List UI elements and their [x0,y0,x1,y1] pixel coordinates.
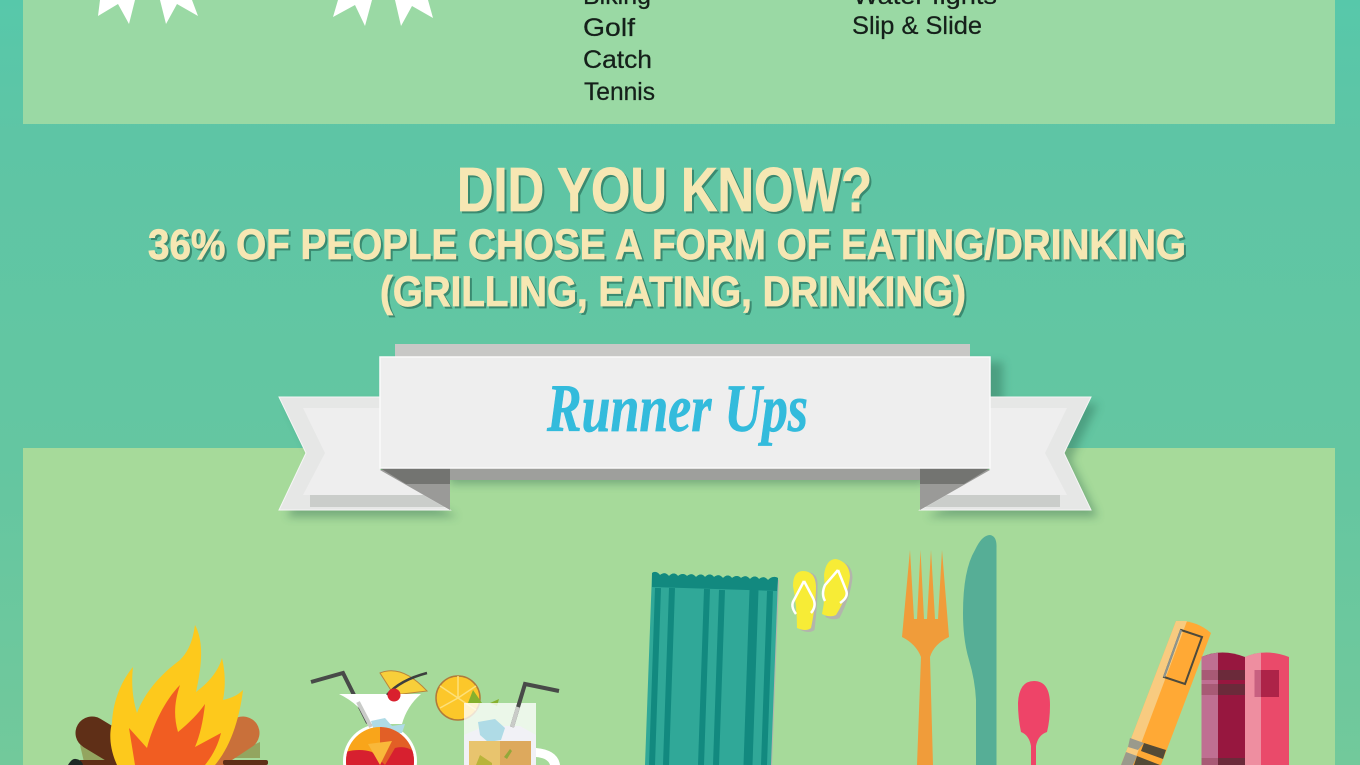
book one [1202,652,1245,765]
icon: sangria glass [311,671,427,765]
text: list column one: Tennis [584,78,655,106]
icon: fork [902,550,949,765]
icon: rosette ribbon tails left [98,0,198,24]
text: eating and drinking statistic: 36% OF PEOPLE CHOSE A FORM OF EATING/DRINKING [148,221,1186,269]
text: list column two: Slip & Slide [852,12,982,40]
icon: stacked books [1202,652,1289,765]
text: list column two [852,0,997,40]
ribbon left tail [279,397,450,510]
icon: flip flops [792,559,852,632]
ribbon back strips [395,344,970,480]
icon: lemonade mason jar [436,676,560,765]
heading: did you know: DID YOU KNOW? [457,156,872,225]
icon: crayon [1121,621,1211,765]
icon: campfire [68,625,268,765]
panel: activities list (top) [23,0,1335,124]
banner title: Runner Ups [546,370,808,446]
ribbon main face [380,357,990,468]
text: eating and drinking statistic [148,221,1186,316]
icon: spoon [1018,681,1050,765]
book two [1245,652,1289,765]
left sandal [792,571,818,632]
right sandal [822,559,852,619]
text: list column one: Catch [583,46,652,74]
icon: rosette ribbon tails right [333,0,433,26]
text: eating and drinking statistic: (GRILLING, EATING, DRINKING) [380,268,966,316]
ribbon right tail [920,397,1091,510]
text: list column one: Golf [583,14,635,42]
icon: table knife [963,535,997,765]
panel: runner ups illustration background [23,448,1335,765]
banner: runner ups ribbon [279,344,1098,517]
text: list column one [583,0,655,106]
icon: beach towel [645,572,779,765]
